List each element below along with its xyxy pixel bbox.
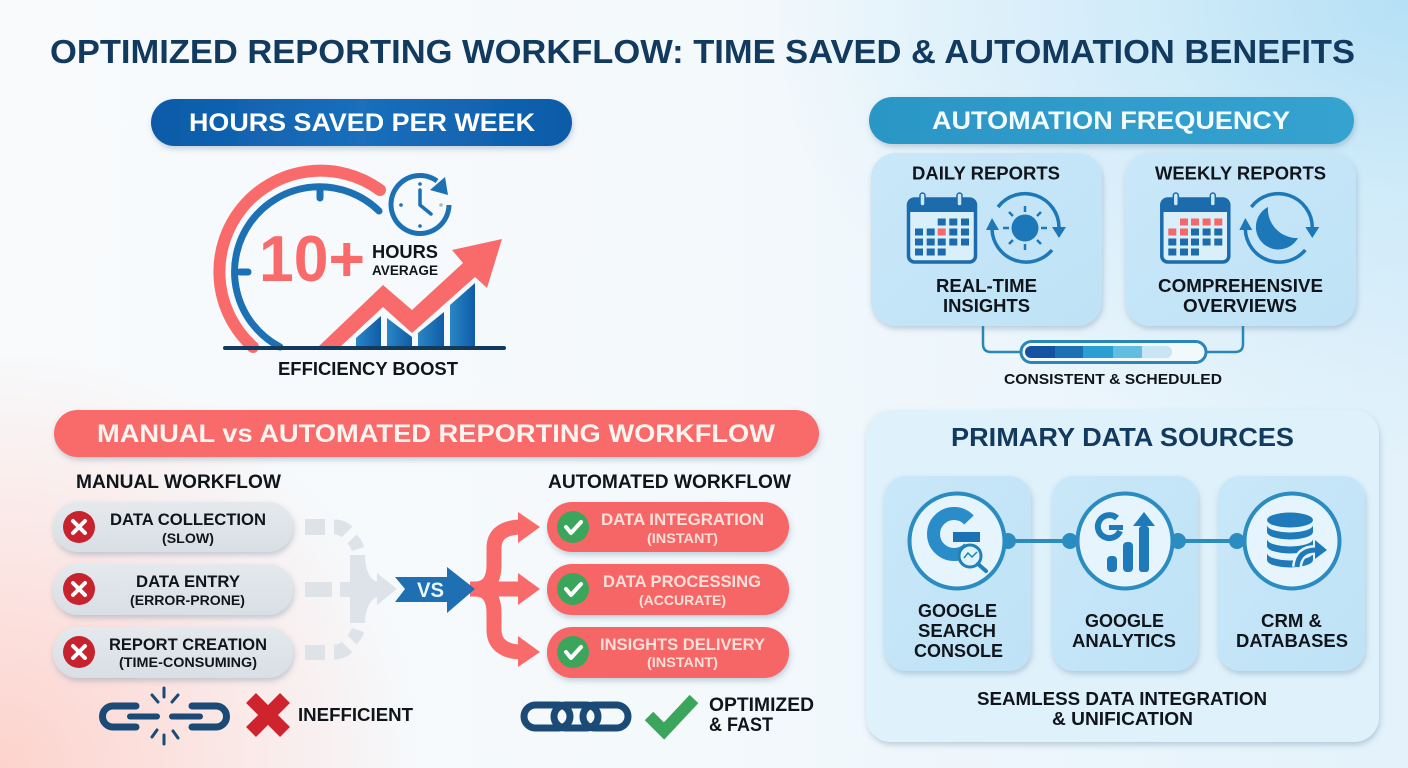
card: google search console: GOOGLE bbox=[918, 600, 997, 621]
heading: automation frequency bbox=[869, 97, 1354, 144]
subheading: manual workflow: MANUAL WORKFLOW bbox=[76, 472, 281, 493]
heading: hours saved bbox=[151, 99, 572, 146]
chart: gauge with growth arrow bbox=[219, 171, 504, 348]
title: OPTIMIZED REPORTING WORKFLOW: TIME SAVED & AUTOMATION BENEFITS bbox=[50, 33, 1355, 70]
heading: manual vs automated bbox=[54, 410, 819, 457]
text: seamless data integration: SEAMLESS DATA INTEGRATION bbox=[977, 689, 1267, 709]
step: data integration: DATA INTEGRATION bbox=[601, 511, 764, 529]
card: daily reports bbox=[871, 153, 1102, 326]
icon: search console bbox=[910, 494, 1004, 588]
step: report creation bbox=[53, 627, 293, 678]
arrow: vs bbox=[395, 567, 475, 613]
text: real-time insights bbox=[936, 275, 1037, 316]
arrow: dashed merge bbox=[305, 519, 397, 660]
label: optimized and fast bbox=[709, 695, 814, 736]
heading: hours saved: HOURS SAVED PER WEEK bbox=[189, 109, 535, 137]
label: optimized and fast: & FAST bbox=[709, 715, 773, 736]
card: google analytics: GOOGLE bbox=[1085, 610, 1164, 631]
icon: analytics bbox=[1078, 494, 1172, 588]
step: data entry bbox=[53, 564, 293, 615]
metric: 10+: 10+ bbox=[259, 222, 365, 295]
step: data collection: DATA COLLECTION bbox=[110, 511, 266, 529]
icon: linked chain bbox=[524, 705, 628, 728]
icon: clock with arrow bbox=[391, 175, 449, 233]
text: real-time insights: REAL-TIME bbox=[936, 275, 1037, 296]
card: crm and databases bbox=[1218, 476, 1365, 671]
card: crm and databases: DATABASES bbox=[1236, 630, 1348, 651]
icon: broken chain bbox=[102, 688, 226, 744]
card: google analytics: ANALYTICS bbox=[1072, 630, 1176, 651]
heading: manual vs automated: MANUAL vs AUTOMATED REPORTING WORKFLOW bbox=[97, 420, 775, 448]
connector lines bbox=[983, 326, 1243, 352]
label: inefficient: INEFFICIENT bbox=[298, 705, 413, 725]
card: weekly reports: WEEKLY REPORTS bbox=[1155, 162, 1326, 184]
text: real-time insights: INSIGHTS bbox=[943, 295, 1030, 316]
text: seamless data integration: & UNIFICATION bbox=[1052, 709, 1193, 729]
label: hours average: HOURS bbox=[372, 242, 438, 262]
step: data processing: DATA PROCESSING bbox=[603, 573, 761, 591]
icon: calendar daily bbox=[908, 193, 976, 262]
card: google search console: CONSOLE bbox=[914, 640, 1003, 661]
icon: green check bbox=[649, 699, 694, 731]
card: crm and databases: CRM & bbox=[1261, 610, 1322, 631]
heading: automation frequency: AUTOMATION FREQUENCY bbox=[932, 107, 1290, 135]
step: data processing bbox=[547, 564, 789, 615]
card: google analytics bbox=[1052, 476, 1198, 671]
panel: hours saved per week bbox=[151, 99, 572, 379]
arrow: growth bbox=[318, 239, 502, 347]
label: consistent and scheduled: CONSISTENT & SCHEDULED bbox=[1004, 371, 1222, 388]
step: report creation: REPORT CREATION bbox=[109, 636, 267, 654]
step: report creation: (TIME-CONSUMING) bbox=[119, 655, 257, 670]
label: optimized and fast: OPTIMIZED bbox=[709, 695, 814, 716]
label: hours average: AVERAGE bbox=[372, 263, 438, 278]
connector line bbox=[1000, 533, 1245, 549]
panel: automation frequency bbox=[869, 97, 1356, 388]
card: google search console: SEARCH bbox=[918, 620, 996, 641]
step: data collection: (SLOW) bbox=[162, 531, 214, 546]
arrow: vs: VS bbox=[417, 579, 444, 602]
label: hours average bbox=[372, 242, 438, 278]
step: data collection bbox=[53, 502, 293, 552]
step: insights delivery: (INSTANT) bbox=[647, 655, 718, 670]
icon: database bbox=[1244, 494, 1340, 588]
text: comprehensive overviews: COMPREHENSIVE bbox=[1158, 275, 1323, 296]
step: insights delivery bbox=[547, 627, 789, 678]
step: data integration: (INSTANT) bbox=[647, 531, 718, 546]
icon: calendar weekly bbox=[1161, 193, 1229, 262]
step: insights delivery: INSIGHTS DELIVERY bbox=[600, 636, 765, 654]
panel: manual vs automated bbox=[53, 410, 819, 744]
subheading: automated workflow: AUTOMATED WORKFLOW bbox=[548, 472, 791, 493]
heading: primary data sources: PRIMARY DATA SOURCES bbox=[951, 422, 1294, 452]
icon: red x bbox=[251, 698, 285, 732]
label: efficiency boost: EFFICIENCY BOOST bbox=[278, 359, 458, 379]
icon: sun cycle bbox=[986, 194, 1066, 262]
bars bbox=[356, 283, 475, 347]
text: comprehensive overviews: OVERVIEWS bbox=[1183, 295, 1297, 316]
step: data entry: (ERROR-PRONE) bbox=[130, 593, 245, 608]
step: data integration bbox=[547, 502, 789, 552]
progress bar bbox=[1021, 342, 1206, 362]
text: comprehensive overviews bbox=[1158, 275, 1323, 316]
step: data entry: DATA ENTRY bbox=[136, 573, 240, 591]
panel: primary data sources bbox=[866, 410, 1379, 742]
card: google search console bbox=[884, 476, 1031, 671]
text: seamless data integration bbox=[977, 689, 1267, 729]
icon: moon cycle bbox=[1239, 194, 1319, 262]
card: daily reports: DAILY REPORTS bbox=[912, 162, 1060, 184]
arrow: coral branches bbox=[470, 512, 540, 667]
step: data processing: (ACCURATE) bbox=[639, 593, 726, 608]
card: weekly reports bbox=[1125, 153, 1356, 326]
